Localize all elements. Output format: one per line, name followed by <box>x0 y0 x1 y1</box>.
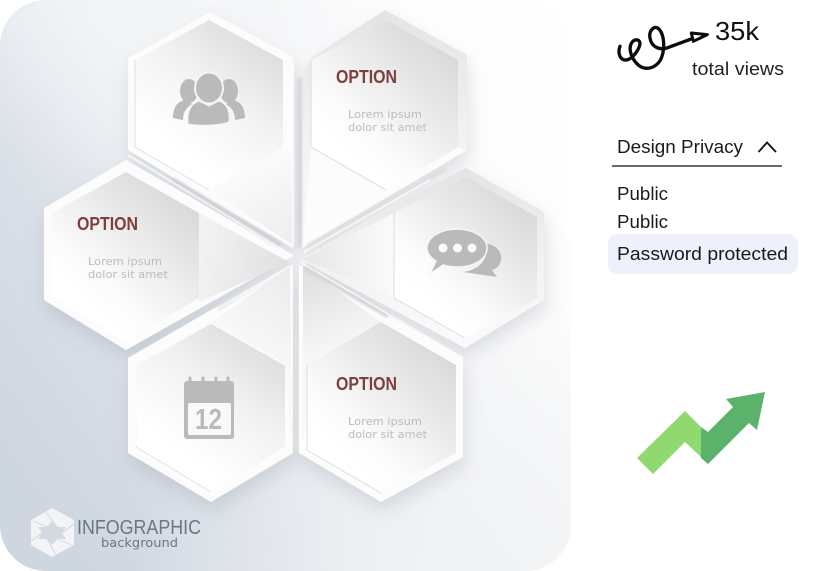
text: lorem ipsum <box>348 417 427 438</box>
text: lorem ipsum <box>88 257 168 278</box>
text: lorem ipsum: dolor sit amet <box>88 268 169 281</box>
icon: people <box>173 72 245 125</box>
logo subtitle: background <box>101 535 178 550</box>
heading: option: OPTION <box>77 214 138 234</box>
hexagon: calendar <box>136 323 285 492</box>
dropdown heading: Design Privacy <box>617 137 743 157</box>
hexagon: chat <box>394 177 537 338</box>
stat label: total views: total views <box>692 59 784 79</box>
option highlight <box>608 234 798 274</box>
rays between hexagons <box>128 60 463 452</box>
option: public: Public <box>617 211 668 232</box>
text: lorem ipsum: dolor sit amet <box>348 428 428 441</box>
icon: chevron up <box>758 142 776 152</box>
heading: option: OPTION <box>336 67 397 87</box>
icon: green growth arrow <box>637 392 765 474</box>
pinwheel blades <box>44 10 544 502</box>
text: lorem ipsum: Lorem ipsum <box>348 415 422 428</box>
icon: logo hexagon <box>31 508 74 557</box>
icon: calendar <box>184 378 234 439</box>
central wedges <box>199 148 466 350</box>
option: password protected: Password protected <box>617 243 788 264</box>
dropdown underline <box>612 165 782 167</box>
hexagon: option top right <box>311 20 458 190</box>
logo: infographic background <box>31 508 201 557</box>
logo wordmark: INFOGRAPHIC <box>77 517 201 539</box>
icon: speech bubbles <box>427 229 501 277</box>
panel background <box>0 0 571 571</box>
heading: option: OPTION <box>336 374 397 394</box>
icon: calendar: 12 <box>195 404 222 436</box>
hexagon: option bottom right <box>307 322 456 493</box>
hexagon: people <box>135 20 283 190</box>
stat: 35k: 35k <box>715 16 760 46</box>
text: lorem ipsum <box>348 110 427 131</box>
dropdown: design privacy <box>608 137 798 274</box>
text: lorem ipsum: Lorem ipsum <box>88 255 162 268</box>
text: lorem ipsum: Lorem ipsum <box>348 108 422 121</box>
option: public: Public <box>617 183 668 204</box>
hexagon: option left <box>61 172 199 312</box>
text: lorem ipsum: dolor sit amet <box>348 121 428 134</box>
panel: hexagon infographic image <box>0 0 571 571</box>
icon: scribble arrow <box>619 27 707 68</box>
